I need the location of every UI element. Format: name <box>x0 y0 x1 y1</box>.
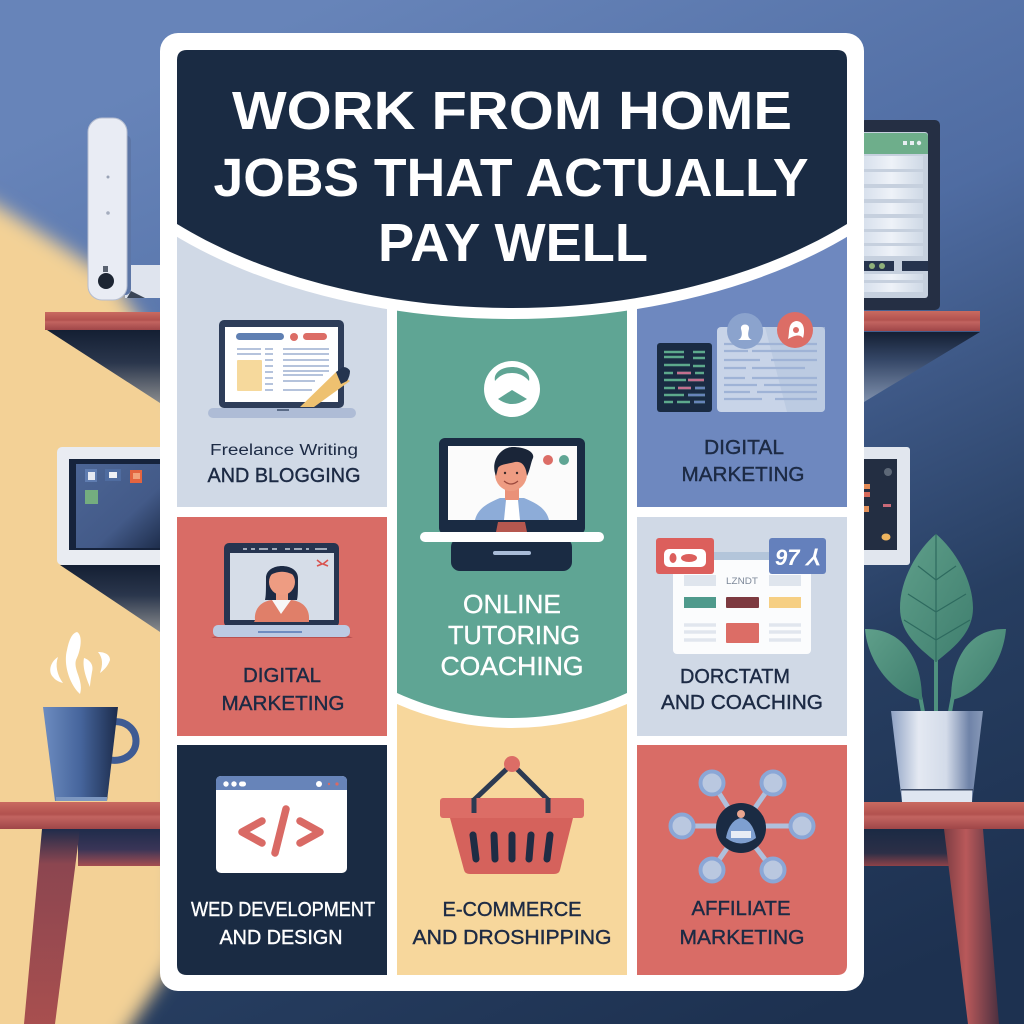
label: digital marketing <box>682 436 804 486</box>
label: online tutoring coaching: COACHING <box>440 651 584 681</box>
icon: dashboard with tags <box>656 538 826 654</box>
label: e-commerce: E-COMMERCE <box>442 898 582 921</box>
label: dorctatm and coaching <box>661 665 823 714</box>
icon: code and document <box>657 312 825 412</box>
title <box>214 81 808 273</box>
panel: e-commerce <box>397 690 627 975</box>
icon: laptop with tutor <box>420 438 604 571</box>
label: freelance writing <box>208 442 360 487</box>
panel: web development <box>177 745 387 975</box>
title: WORK FROM HOME <box>232 81 792 141</box>
left upper shelf <box>45 312 160 403</box>
right upper monitor <box>860 120 940 310</box>
label: online tutoring coaching: TUTORING <box>448 620 580 650</box>
label: affiliate marketing: MARKETING <box>680 926 804 949</box>
icon: laptop with pencil <box>208 320 356 418</box>
left wall router device <box>88 118 165 300</box>
label: web development: WED DEVELOPMENT <box>191 898 375 921</box>
potted plant <box>865 534 1006 802</box>
label: freelance writing: AND BLOGGING <box>208 464 360 487</box>
label: digital marketing <box>222 664 344 715</box>
panel: digital marketing right <box>637 225 847 507</box>
icon: dashboard with tags: LZNDT <box>726 576 758 587</box>
label: affiliate marketing <box>680 897 804 949</box>
title: PAY WELL <box>378 213 648 273</box>
label: dorctatm and coaching: DORCTATM <box>680 665 790 688</box>
right upper shelf <box>864 311 980 402</box>
poster card <box>160 33 864 991</box>
label: digital marketing: MARKETING <box>222 692 344 715</box>
icon: tutoring logo <box>484 361 540 417</box>
icon: laptop with woman <box>211 543 353 638</box>
icon: shopping basket <box>440 756 584 874</box>
label: online tutoring coaching <box>442 594 582 676</box>
label: online tutoring coaching: ONLINE <box>463 589 561 619</box>
panel: online tutoring <box>397 260 627 718</box>
icon: affiliate network <box>670 772 814 882</box>
label: e-commerce <box>412 898 612 949</box>
left wall tablet <box>57 447 167 632</box>
label: e-commerce: AND DROSHIPPING <box>412 926 612 949</box>
label: web development: AND DESIGN <box>220 926 342 949</box>
label: digital marketing: MARKETING <box>682 463 804 486</box>
panel: freelance writing <box>177 225 387 507</box>
label: dorctatm and coaching: AND COACHING <box>661 691 823 714</box>
icon: dashboard with tags: 97 ⅄ <box>775 545 821 570</box>
label: freelance writing: Freelance Writing <box>210 442 358 459</box>
header banner <box>177 50 847 308</box>
right table <box>864 802 1024 1024</box>
panel: affiliate marketing <box>637 745 847 975</box>
left table <box>0 802 160 1024</box>
coffee mug with steam <box>43 632 136 801</box>
icon: browser window with code <box>216 776 347 873</box>
label: affiliate marketing: AFFILIATE <box>692 897 790 920</box>
panel: doctoral and coaching <box>637 517 847 736</box>
label: digital marketing: DIGITAL <box>243 664 321 687</box>
label: digital marketing: DIGITAL <box>704 436 784 459</box>
label: web development <box>191 898 375 949</box>
title: JOBS THAT ACTUALLY <box>214 148 808 208</box>
right wall tablet <box>860 447 910 565</box>
panel: digital marketing left <box>177 517 387 736</box>
